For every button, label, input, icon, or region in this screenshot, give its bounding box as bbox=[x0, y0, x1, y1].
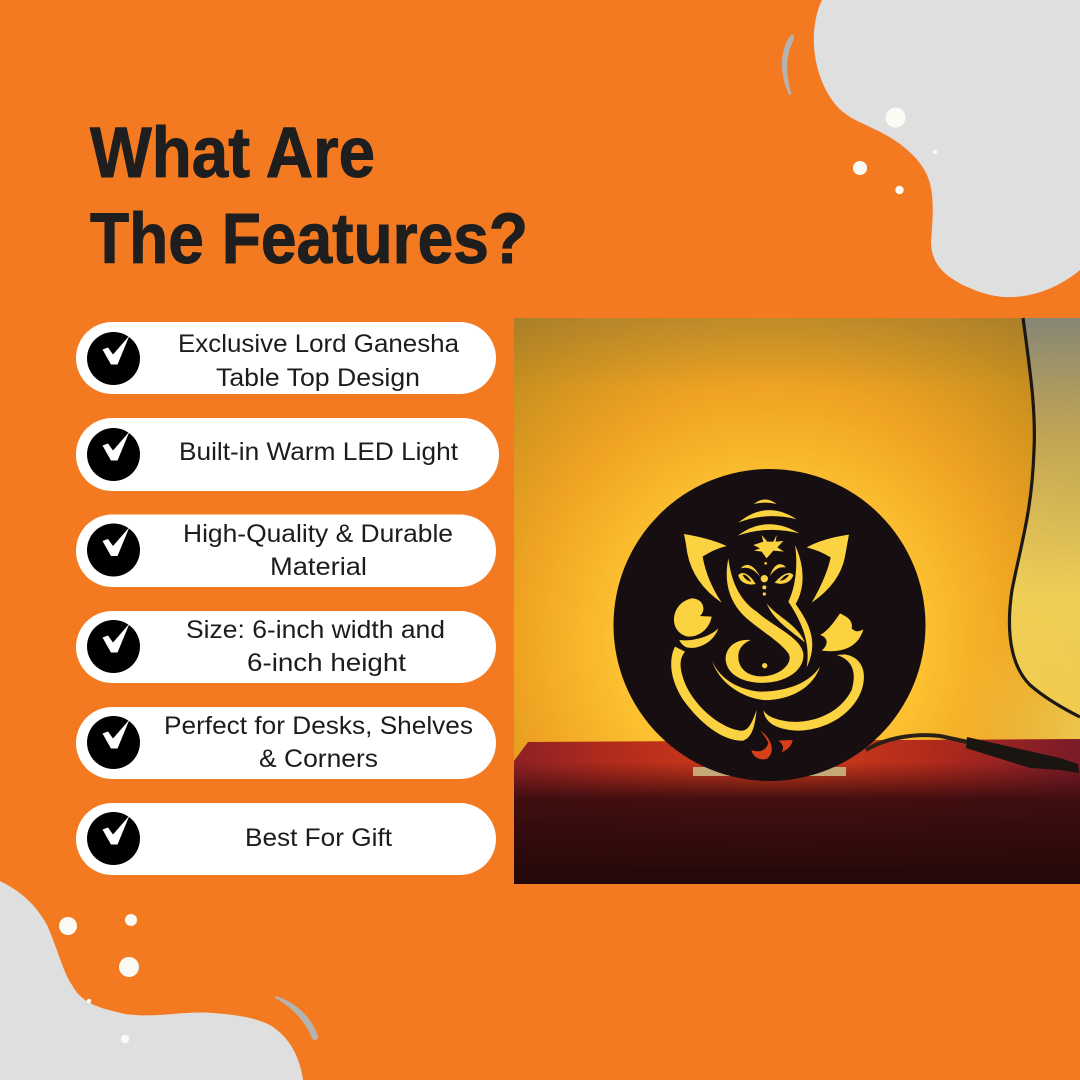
hands bbox=[674, 598, 712, 637]
ears bbox=[684, 534, 727, 603]
decorative swoosh: bottom bbox=[275, 996, 318, 1040]
label bbox=[183, 520, 453, 581]
icon: check bbox=[87, 524, 140, 576]
label: Material bbox=[270, 553, 367, 581]
eyes bbox=[738, 573, 756, 584]
label: Size: 6-inch width and bbox=[186, 616, 445, 644]
lamp disc with cut-out bbox=[614, 469, 926, 781]
title: What Are bbox=[90, 114, 375, 193]
label: High-Quality & Durable bbox=[183, 520, 453, 548]
label bbox=[164, 712, 473, 773]
tilak bbox=[753, 535, 784, 558]
feature pill 3 bbox=[76, 514, 496, 587]
dots: bottom left bbox=[59, 914, 139, 1043]
decorative blob: bottom left bbox=[0, 881, 303, 1080]
icon: check bbox=[87, 812, 140, 865]
forehead and face dots bbox=[761, 575, 768, 582]
trunk bbox=[726, 558, 803, 683]
feature pill 6 bbox=[76, 803, 496, 875]
belly bbox=[712, 661, 820, 700]
feature pill 2 bbox=[76, 418, 499, 491]
label bbox=[186, 616, 445, 677]
title bbox=[90, 114, 528, 279]
product photo: Ganesha table lamp bbox=[514, 318, 1080, 884]
decorative blob: top right bbox=[814, 0, 1080, 297]
dots: top right bbox=[853, 108, 937, 194]
crown bbox=[754, 499, 777, 504]
icon: check bbox=[87, 428, 140, 481]
icon: check bbox=[87, 620, 140, 673]
feature pill 5 bbox=[76, 707, 496, 779]
label: Best For Gift bbox=[245, 824, 392, 852]
label: Built-in Warm LED Light bbox=[179, 438, 458, 466]
icon: check bbox=[87, 716, 140, 769]
wall bbox=[514, 318, 1080, 884]
label bbox=[178, 330, 459, 392]
label: Exclusive Lord Ganesha bbox=[178, 330, 459, 358]
label: & Corners bbox=[259, 745, 378, 773]
label: 6-inch height bbox=[247, 649, 406, 677]
wall cord bbox=[1009, 318, 1080, 717]
decorative swoosh: top bbox=[782, 35, 794, 95]
label: Perfect for Desks, Shelves bbox=[164, 712, 473, 740]
feature pill 4 bbox=[76, 611, 496, 683]
title: The Features? bbox=[90, 200, 528, 279]
legs bbox=[671, 647, 757, 741]
icon: check bbox=[87, 332, 140, 385]
power cord and plug bbox=[866, 735, 1079, 773]
table bbox=[514, 739, 1080, 884]
feet bbox=[752, 731, 793, 759]
feature pill 1 bbox=[76, 322, 496, 394]
lamp stand bbox=[693, 767, 846, 776]
label: Table Top Design bbox=[216, 364, 420, 392]
